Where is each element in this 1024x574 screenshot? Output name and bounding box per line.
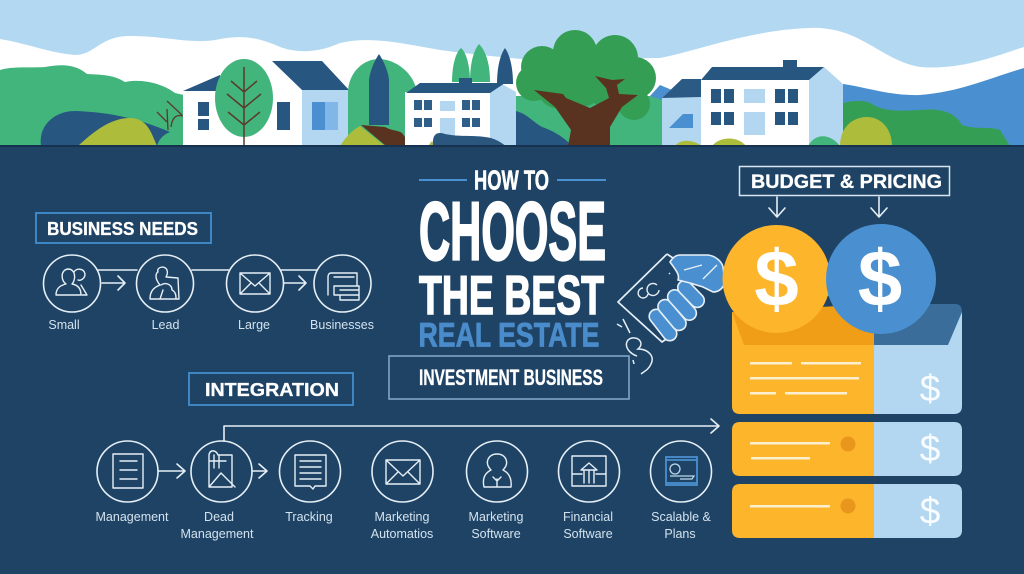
green dome and spire (340, 54, 416, 146)
bare shrub (157, 101, 183, 130)
title: choose: CHOOSE (419, 184, 606, 278)
coin: blue: $ (858, 234, 902, 323)
connectors: business needs (98, 270, 317, 290)
pricing card: top (732, 304, 962, 414)
item: small: Small (48, 318, 80, 332)
item: scalable and plans: Plans (664, 527, 696, 541)
arrow: integration to pricing (224, 419, 719, 441)
heading: integration (189, 373, 353, 405)
background trees (452, 44, 513, 84)
house 1 (183, 59, 349, 146)
item: large (226, 255, 284, 332)
item: financial software: Financial (563, 510, 613, 524)
item: small (44, 255, 100, 332)
coin: orange (722, 225, 830, 333)
subtitle box: investment business: INVESTMENT BUSINESS (419, 365, 603, 390)
item: tracking (280, 441, 340, 524)
heading: integration: INTEGRATION (205, 379, 339, 400)
item: scalable and plans (650, 441, 712, 541)
dark mound (41, 111, 170, 146)
item: dead management (181, 441, 254, 541)
house 3 (662, 60, 843, 146)
item: businesses (310, 255, 374, 332)
subtitle box: investment business (389, 356, 629, 399)
item: marketing automation (371, 441, 433, 541)
item: large: Large (238, 318, 270, 332)
item: financial software: Software (563, 527, 613, 541)
right hills (840, 101, 1010, 146)
heading: business needs: BUSINESS NEEDS (47, 218, 198, 239)
arrows: integration row (158, 464, 267, 478)
item: management: Management (96, 510, 169, 524)
bush (157, 131, 195, 146)
mid ground hill (516, 85, 672, 146)
arrows: budget to coins (769, 197, 887, 217)
label: how to: HOW TO (474, 164, 549, 196)
landscape banner (0, 0, 1024, 147)
item: dead management: Dead (204, 510, 234, 524)
item: marketing automation: Marketing (375, 510, 429, 524)
item: dead management: Management (181, 527, 254, 541)
pricing card: top: $ (920, 368, 940, 409)
pricing card: middle: $ (920, 428, 940, 469)
item: lead (136, 255, 194, 332)
heading: budget and pricing: BUDGET & PRICING (751, 171, 942, 193)
pricing card: bottom: $ (920, 490, 940, 532)
olive mound (78, 118, 157, 146)
item: marketing software: Software (471, 527, 521, 541)
item: tracking: Tracking (285, 510, 333, 524)
coin: blue (826, 224, 936, 334)
item: businesses: Businesses (310, 318, 374, 332)
pricing card: middle (732, 422, 962, 476)
item: scalable and plans: Scalable & (651, 510, 712, 524)
item: financial software (558, 441, 620, 541)
title: the best: THE BEST (419, 264, 604, 326)
item: management (96, 441, 169, 524)
coin: green (818, 262, 854, 298)
icon: hand holding card (617, 254, 725, 374)
item: lead: Lead (152, 318, 179, 332)
coin: orange: $ (754, 234, 799, 323)
pricing card: bottom (732, 484, 962, 538)
blue hill (843, 68, 1024, 146)
oak tree (516, 30, 656, 146)
item: marketing software: Marketing (469, 510, 523, 524)
green hill left (0, 65, 184, 146)
item: marketing automation: Automatios (371, 527, 433, 541)
item: marketing software (466, 441, 528, 541)
title: real estate: REAL ESTATE (418, 316, 600, 354)
heading: business needs (36, 213, 211, 243)
house 2 (405, 78, 516, 146)
heading: budget and pricing (740, 166, 950, 196)
